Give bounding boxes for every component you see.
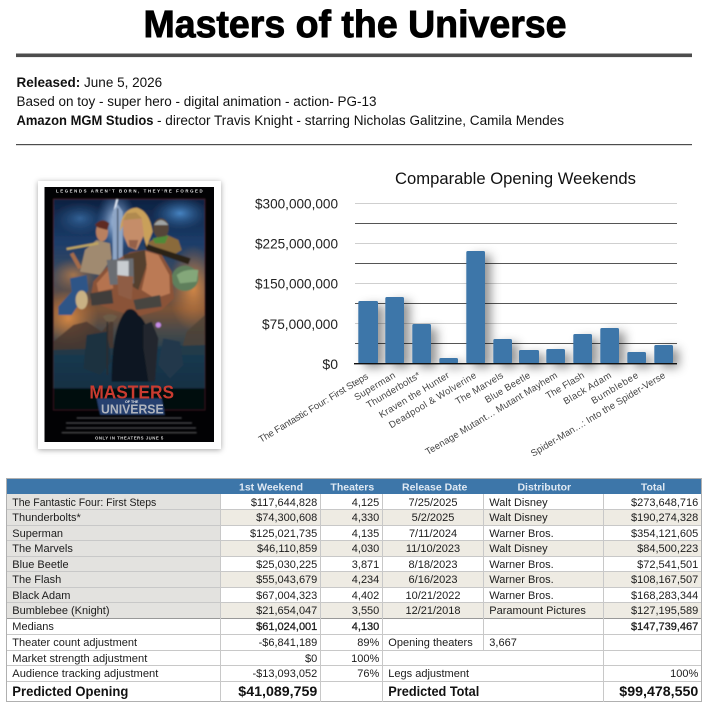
movie poster (38, 181, 221, 449)
left woman (80, 240, 112, 275)
row labels: Medians (12, 621, 54, 633)
distributor column: Warner Bros. (489, 590, 554, 602)
total column: $84,500,223 (637, 543, 698, 555)
y axis labels: $0 (322, 356, 338, 372)
distributor column: Paramount Pictures (489, 605, 586, 617)
first weekend column: $46,110,859 (257, 543, 317, 555)
header labels: Total (641, 482, 665, 494)
sword tip (103, 314, 117, 322)
first weekend column: $61,024,001 (256, 621, 317, 633)
x axis labels: Superman (352, 370, 398, 403)
release date column: 7/25/2025 (409, 497, 457, 509)
logo backing (97, 398, 165, 415)
first weekend column: $74,300,608 (256, 512, 317, 524)
total column: 100% (670, 668, 699, 680)
release date column: 7/11/2024 (409, 528, 457, 540)
release date column: 5/2/2025 (412, 512, 454, 524)
theaters column: 76% (357, 668, 380, 680)
theaters column: 4,330 (352, 512, 379, 524)
first weekend column: $0 (305, 653, 317, 665)
hooded villain (112, 309, 153, 382)
x axis labels: The Fantastic Four: First Steps (257, 371, 371, 445)
release date column: 11/10/2023 (406, 543, 460, 555)
total column: $72,541,501 (637, 559, 698, 571)
hero body (90, 250, 174, 317)
distributor column: Warner Bros. (489, 559, 554, 571)
first weekend column: $125,021,735 (250, 528, 317, 540)
poster logo: UNIVERSE (101, 403, 164, 417)
y axis labels: $225,000,000 (255, 236, 338, 252)
release date column (405, 497, 461, 617)
adjustment labels: Opening theaters (388, 637, 473, 649)
credits (62, 417, 197, 433)
first weekend column: $25,030,225 (256, 559, 317, 571)
x axis labels: Spider-Man…: Into the Spider-Verse (529, 370, 668, 459)
total column: $147,739,467 (631, 621, 698, 633)
release date line: Released: June 5, 2026 (16, 75, 162, 90)
bar chart: comparable opening weekends (255, 170, 677, 459)
chart title: Comparable Opening Weekends (395, 170, 636, 188)
poster tagline: LEGENDS AREN'T BORN, THEY'RE FORGED (56, 189, 203, 194)
hero head (120, 208, 153, 247)
header labels (239, 482, 665, 494)
theaters column: 100% (351, 653, 380, 665)
total column: $108,167,507 (631, 574, 698, 586)
first weekend column: $67,004,323 (256, 590, 317, 602)
movie details text (16, 75, 564, 128)
first weekend column: $55,043,679 (256, 574, 317, 586)
row labels: Blue Beetle (12, 559, 69, 571)
theaters column: 4,125 (352, 497, 379, 509)
predicted results row: $99,478,550 (619, 684, 698, 699)
data table (6, 478, 702, 702)
theaters column: 3,550 (352, 605, 379, 617)
x axis labels: Bumblebee (589, 370, 641, 407)
x axis labels: Thunderbolts* (365, 370, 423, 411)
first weekend column: -$6,841,189 (259, 637, 317, 649)
y axis labels: $300,000,000 (255, 196, 338, 212)
release date column: 6/16/2023 (409, 574, 457, 586)
theaters column: 4,135 (352, 528, 379, 540)
release date column: 10/21/2022 (405, 590, 461, 602)
y axis labels: $150,000,000 (255, 276, 338, 292)
header labels: Release Date (402, 482, 468, 494)
predicted results row (12, 684, 698, 699)
genre line: Based on toy - super hero - digital animation - action- PG-13 (16, 94, 376, 109)
first weekend column: $21,654,047 (256, 605, 317, 617)
studio and cast line: - director Travis Knight - starring Nicholas Galitzine, Camila Mendes (157, 113, 564, 128)
theaters column: 4,030 (352, 543, 379, 555)
row shading (6, 494, 702, 618)
poster logo: MASTERS (89, 381, 174, 402)
adjustment labels (388, 637, 473, 680)
y axis labels (255, 196, 338, 372)
studio and cast line: Amazon MGM Studios (16, 113, 154, 128)
blue robot (58, 275, 88, 315)
total column: $354,121,605 (631, 528, 698, 540)
first weekend column (250, 497, 317, 680)
predicted results row: $41,089,759 (238, 684, 317, 699)
predicted results row: Predicted Total (388, 684, 479, 699)
table header (6, 479, 702, 494)
theaters column: 89% (357, 637, 380, 649)
distributor column: Walt Disney (489, 543, 548, 555)
theaters column: 4,234 (352, 574, 379, 586)
green creature (172, 266, 198, 291)
header labels: Theaters (330, 482, 374, 494)
distributor column: Walt Disney (489, 497, 548, 509)
row labels: Market strength adjustment (12, 653, 147, 665)
x axis labels: Teenage Mutant… Mutant Mayhem (424, 370, 560, 458)
row labels: The Flash (12, 574, 61, 586)
poster logo: OF THE (125, 400, 139, 404)
x axis labels: Black Adam (562, 370, 614, 407)
row labels: The Fantastic Four: First Steps (12, 497, 157, 509)
release date column: 8/18/2023 (409, 559, 457, 571)
x axis labels: Blue Beetle (483, 370, 533, 406)
distributor column (489, 497, 586, 649)
row labels: Thunderbolts* (12, 512, 82, 524)
y axis labels: $75,000,000 (262, 316, 338, 332)
sorceress (143, 322, 158, 382)
total column (631, 497, 699, 680)
row labels: Theater count adjustment (12, 637, 137, 649)
theaters column: 3,871 (352, 559, 379, 571)
distributor column: Warner Bros. (489, 574, 554, 586)
row labels: Bumblebee (Knight) (12, 605, 110, 617)
header labels: Distributor (517, 482, 571, 494)
release date column: 12/21/2018 (405, 605, 461, 617)
row labels: The Marvels (12, 543, 73, 555)
poster release note: ONLY IN THEATERS JUNE 5 (95, 435, 164, 440)
row labels: Audience tracking adjustment (12, 668, 158, 680)
first weekend column: $117,644,828 (251, 497, 317, 509)
adjustment labels: Legs adjustment (388, 668, 469, 680)
x axis labels: Kraven the Hunter (377, 370, 452, 421)
theaters column: 4,402 (352, 590, 379, 602)
castle and crowd (53, 318, 113, 355)
row labels: Superman (12, 528, 63, 540)
theaters column (351, 497, 380, 680)
distributor column: 3,667 (489, 637, 517, 649)
hero sword (113, 204, 123, 263)
total column: $273,648,716 (631, 497, 698, 509)
distributor column: Walt Disney (489, 512, 548, 524)
bars (358, 251, 673, 364)
x axis labels: The Flash (544, 370, 587, 402)
x axis labels: The Marvels (454, 370, 506, 407)
total column: $127,195,589 (631, 605, 698, 617)
header labels: 1st Weekend (239, 482, 303, 494)
row labels (12, 497, 158, 680)
right warrior (147, 233, 182, 255)
poster logo (89, 381, 174, 417)
x axis labels: Deadpool & Wolverine (387, 370, 479, 431)
theaters column: 4,130 (352, 621, 379, 633)
total column: $168,283,344 (631, 590, 698, 602)
first weekend column: -$13,093,052 (252, 668, 317, 680)
distributor column: Warner Bros. (489, 528, 554, 540)
title: Masters of the Universe (144, 4, 566, 46)
total column: $190,274,328 (631, 512, 698, 524)
row labels: Black Adam (12, 590, 70, 602)
x axis labels (257, 370, 668, 459)
predicted results row: Predicted Opening (12, 684, 128, 699)
